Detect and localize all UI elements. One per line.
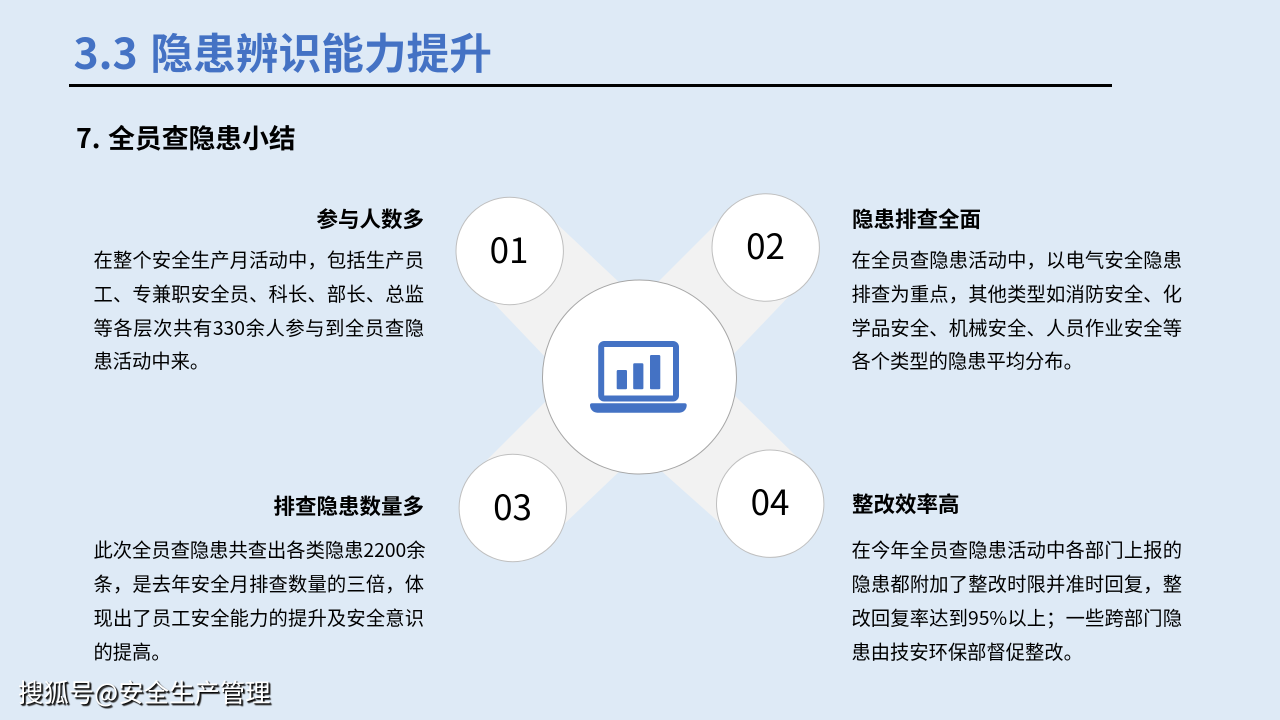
circle 02 (712, 194, 819, 301)
circle 02: 02 (746, 219, 785, 270)
text 02: 排查为重点，其他类型如消防安全、化 (852, 279, 1182, 307)
central diagram (456, 193, 824, 562)
circle 04 (716, 450, 824, 557)
section heading: 7. 全员查隐患小结 (76, 117, 296, 156)
text 02: 学品安全、机械安全、人员作业安全等 (852, 313, 1182, 341)
title: 3.3 隐患辨识能力提升 (74, 20, 492, 82)
circle 03 (459, 454, 566, 562)
text 04: 隐患都附加了整改时限并准时回复，整 (852, 569, 1182, 597)
panel: 04 rectification (852, 488, 1182, 665)
text 04: 在今年全员查隐患活动中各部门上报的 (852, 535, 1182, 563)
center circle (542, 280, 736, 474)
text 04 (852, 535, 1182, 665)
icon: laptop with bar chart (590, 344, 687, 413)
panel: 03 quantity (94, 490, 426, 665)
text 01: 在整个安全生产月活动中，包括生产员 (94, 245, 424, 273)
text 02: 在全员查隐患活动中，以电气安全隐患 (852, 245, 1182, 273)
text 01 (94, 245, 424, 374)
panel: 02 coverage (852, 203, 1182, 374)
text 04: 改回复率达到95%以上；一些跨部门隐 (852, 603, 1182, 631)
text 04: 患由技安环保部督促整改。 (852, 637, 1083, 665)
watermark: 搜狐号@安全生产管理 (18, 674, 271, 710)
circle 04: 04 (751, 475, 789, 526)
text 01: 工、专兼职安全员、科长、部长、总监 (94, 279, 424, 307)
heading 04: 整改效率高 (852, 488, 960, 519)
text 02 (852, 245, 1182, 374)
circle 03: 03 (493, 480, 532, 531)
circle 01 (456, 197, 563, 305)
text 01: 患活动中来。 (94, 346, 209, 374)
text 03: 此次全员查隐患共查出各类隐患2200余 (94, 535, 426, 563)
text 03 (94, 535, 426, 665)
heading 03: 排查隐患数量多 (273, 490, 424, 521)
text 03: 的提高。 (94, 637, 171, 665)
text 03: 条，是去年安全月排查数量的三倍，体 (94, 569, 424, 597)
text 03: 现出了员工安全能力的提升及安全意识 (94, 603, 424, 631)
text 02: 各个类型的隐患平均分布。 (852, 346, 1083, 374)
heading 01: 参与人数多 (316, 203, 424, 234)
text 01: 等各层次共有330余人参与到全员查隐 (94, 313, 424, 341)
connector bands (485, 220, 798, 528)
circle 01: 01 (490, 223, 528, 274)
panel: 01 participants (94, 203, 424, 374)
heading 02: 隐患排查全面 (852, 203, 981, 234)
